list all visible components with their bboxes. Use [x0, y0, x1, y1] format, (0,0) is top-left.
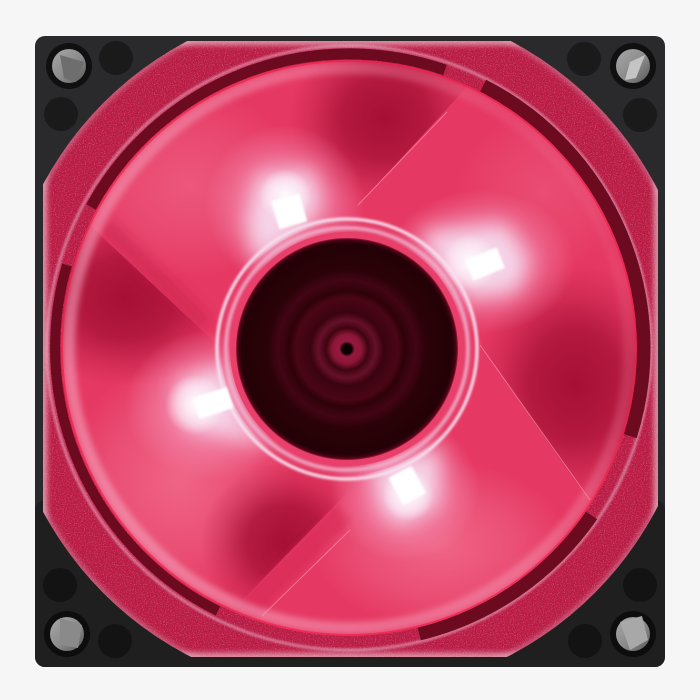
LED chip top [271, 193, 307, 229]
fan rotor disc [61, 60, 637, 636]
LED glow halos [125, 125, 575, 562]
dark blade: right [489, 278, 636, 490]
LED glow top [246, 170, 322, 265]
pale inner rim [47, 46, 651, 650]
mounting holes: top right [567, 42, 657, 132]
LED glow bottom [372, 448, 440, 526]
hub surround ring [217, 219, 477, 479]
dark blade: bottom [209, 471, 341, 598]
band between bottom seams [245, 512, 345, 612]
mounting holes: top left [44, 41, 133, 131]
dark blade: left [62, 229, 208, 376]
pale outer rim of rotor [69, 68, 629, 628]
LED glow arms [176, 170, 530, 526]
mounting holes: bottom left [43, 568, 132, 658]
mounting holes: bottom right [568, 568, 657, 658]
LED chips [192, 193, 505, 505]
lighter blade areas [330, 476, 549, 614]
pale edge glow [43, 41, 658, 657]
LED chip bottom [388, 466, 426, 505]
LED glow right [420, 224, 530, 298]
hub centre with concentric rings [236, 238, 458, 460]
LED glow left [176, 364, 275, 448]
blade seams [262, 112, 590, 616]
LED cores [165, 169, 498, 521]
LED chip left [192, 387, 234, 419]
dark blade: top [300, 60, 462, 196]
soft shade along left seam [105, 225, 205, 325]
LED chip right [465, 247, 505, 281]
dark gap arcs between rotor and shroud [55, 54, 643, 633]
illuminated shroud [43, 41, 658, 657]
